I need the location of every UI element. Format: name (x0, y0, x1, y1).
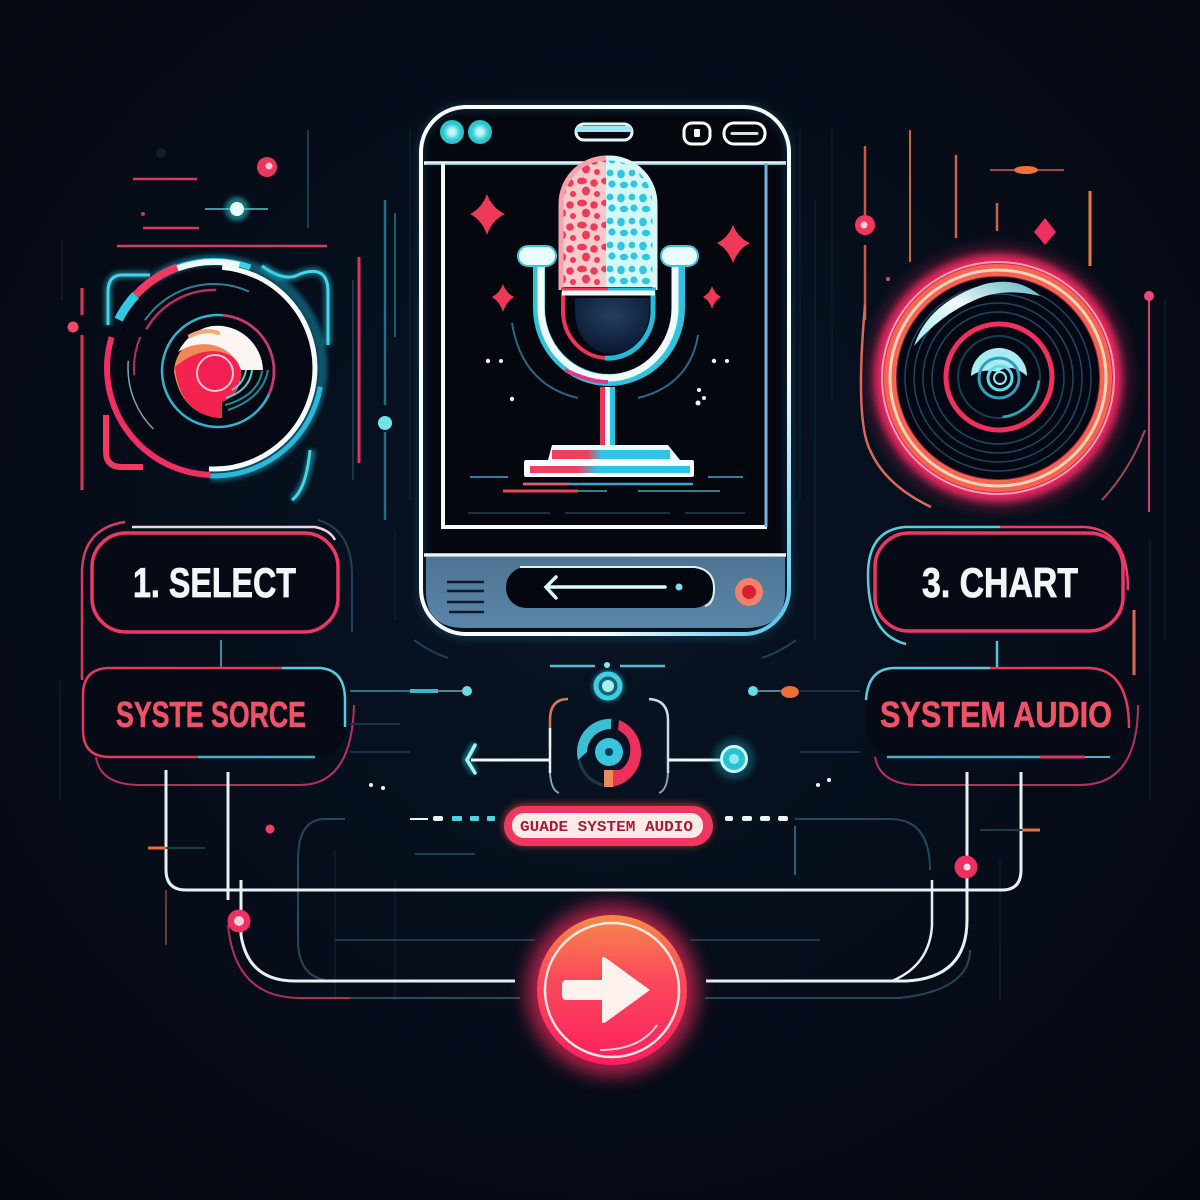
label box: 1. SELECT (82, 520, 352, 680)
label box: 1. SELECT: 1. SELECT (133, 559, 296, 606)
icon: small disc node (466, 670, 754, 793)
button label pill: GUADE SYSTEM AUDIO (520, 819, 693, 836)
start button with arrow (526, 904, 698, 1076)
label box: system source: SYSTE SORCE (116, 694, 306, 735)
decorative lines and nodes: upper right (855, 130, 1154, 512)
left arrow (466, 744, 549, 773)
wiring (166, 770, 1021, 998)
sparkles (470, 194, 750, 312)
icon: left camera disc (106, 260, 328, 500)
mic base (470, 445, 743, 491)
right target (668, 739, 754, 779)
screen bottom panel (426, 557, 785, 628)
dots (486, 359, 729, 406)
disc (577, 719, 641, 787)
menu icon (447, 582, 484, 612)
phone window (414, 107, 796, 658)
button label pill (503, 804, 713, 846)
label box: 3. CHART: 3. CHART (922, 559, 1078, 606)
center: orange half, white wedge, pink body, dark grooves (176, 326, 222, 418)
label box: system audio: SYSTEM AUDIO (880, 694, 1112, 735)
label box: system audio (866, 668, 1138, 785)
icon: right speaker disc (856, 236, 1140, 520)
icon: microphone (470, 158, 750, 491)
mic head (561, 158, 656, 290)
mic cup (562, 292, 655, 358)
dashed connector (410, 816, 788, 821)
record button (735, 578, 763, 606)
label box: 3. CHART (868, 527, 1134, 675)
label box: system source (83, 668, 354, 785)
mic cradle (518, 246, 698, 382)
mic stem (600, 387, 615, 445)
back pill (506, 567, 714, 608)
side connectors (350, 662, 860, 790)
decorative lines and nodes: upper left (68, 130, 395, 520)
wiring nodes (148, 824, 1040, 945)
